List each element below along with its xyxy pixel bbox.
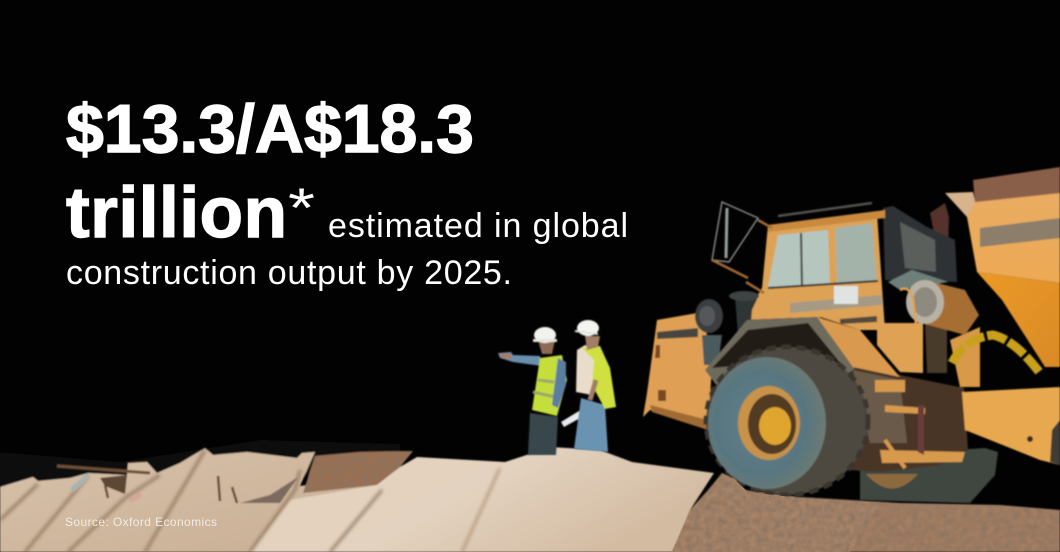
engine grille xyxy=(883,206,957,290)
dump bed xyxy=(945,167,1060,367)
cab body xyxy=(745,213,885,330)
rear chassis beam xyxy=(962,387,1060,465)
headline xyxy=(66,91,628,292)
front tyre tread xyxy=(706,347,868,495)
worker pointing xyxy=(498,327,567,455)
description line 1: estimated in global xyxy=(328,207,628,245)
chassis dark section xyxy=(850,365,968,472)
chassis details xyxy=(875,380,965,468)
exhaust pipe xyxy=(930,203,949,281)
right tarp xyxy=(250,447,714,552)
wing mirror xyxy=(712,202,772,293)
front tyre sidewall xyxy=(708,357,826,489)
mudguard and side body xyxy=(705,317,980,395)
cab windows xyxy=(768,223,878,288)
blueprint roll xyxy=(561,411,582,427)
photo: dump truck xyxy=(643,167,1060,503)
headline unit: trillion xyxy=(66,174,287,253)
hydraulic hose xyxy=(952,335,1040,373)
asterisk: * xyxy=(288,176,315,239)
tarp folds xyxy=(0,450,500,552)
soil foreground overlap xyxy=(672,475,880,552)
strut panel behind tyre xyxy=(853,370,907,443)
source note: Source: Oxford Economics xyxy=(65,515,217,529)
front engine box xyxy=(643,312,712,430)
photo: ground, tarps and soil xyxy=(0,440,1060,552)
headlight and intake pillar xyxy=(695,291,759,365)
right soil mound xyxy=(672,473,1060,552)
cab roof rail xyxy=(778,203,872,216)
dark background silt xyxy=(0,440,400,490)
rear tyre xyxy=(860,448,998,503)
door stripe and label xyxy=(790,286,882,324)
description line 2: construction output by 2025. xyxy=(66,254,512,292)
headline figure: $13.3/A$18.3 xyxy=(66,91,474,167)
soil patch xyxy=(303,451,413,493)
front wheel hub xyxy=(738,386,800,460)
stakes and mesh xyxy=(57,466,298,503)
photo: two site workers xyxy=(498,320,616,455)
left tarps xyxy=(0,448,400,552)
worker with jeans xyxy=(574,320,616,452)
air filter canister xyxy=(900,280,979,370)
